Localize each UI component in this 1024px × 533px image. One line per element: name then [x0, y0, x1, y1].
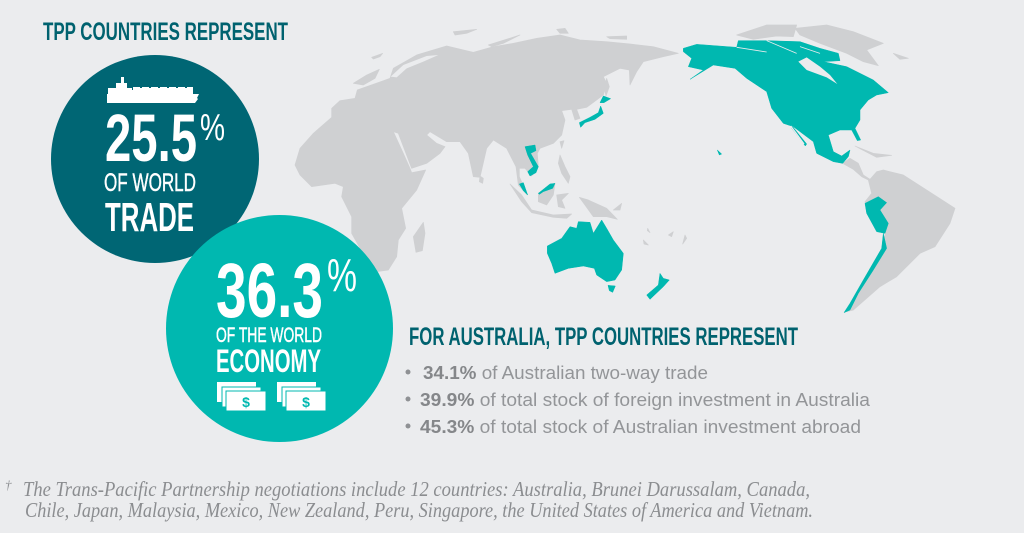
- map: Americas and Pacific: [643, 25, 955, 313]
- world map: [295, 25, 955, 313]
- map: grey Americas: [643, 25, 955, 312]
- map: Baja California gap: [791, 126, 804, 144]
- map: Sumatra and Java: [510, 184, 572, 218]
- map: Australia: [547, 220, 623, 282]
- circle: world trade: [51, 55, 259, 263]
- map: Vietnam: [525, 145, 538, 176]
- footnote: †: [5, 477, 12, 492]
- map: Madagascar: [413, 222, 425, 252]
- map: Afro-Eurasia in grey: [295, 28, 678, 272]
- map: Baltic and White Sea inlets: [391, 55, 438, 77]
- stat: 36.3 percent: 36.3: [216, 248, 323, 334]
- map: Borneo: [538, 183, 555, 205]
- map: Malaysia: [519, 183, 528, 195]
- icon: banknotes left: [217, 382, 266, 411]
- footnote: The Trans-Pacific Partnership negotiations include 12 countries: Australia, Brunei Darussalam, Canada,: [23, 477, 810, 501]
- map: Hudson Bay: [798, 57, 837, 84]
- map: Arctic channels: [737, 41, 820, 53]
- bullet list: Australian statistics: 34.1% of Australian two-way trade: [423, 363, 708, 383]
- map: New Guinea: [579, 197, 617, 219]
- map: Sulawesi and Moluccas: [557, 193, 568, 208]
- icon: banknotes left: $: [242, 394, 250, 410]
- circle: world economy: ECONOMY: [216, 343, 321, 379]
- circle: world economy: [166, 215, 393, 442]
- label: of world trade: OF WORLD: [104, 169, 196, 197]
- map: TPP members in Asia-Pacific: [519, 96, 623, 292]
- map: Tasmania: [608, 285, 615, 292]
- heading: for Australia: FOR AUSTRALIA, TPP COUNTRIES REPRESENT: [409, 323, 798, 351]
- circle: world trade: %: [200, 107, 225, 149]
- icon: banknotes right: $: [302, 394, 310, 410]
- stat: 25.5 percent: 25.5: [105, 101, 197, 176]
- circle: world economy: %: [327, 249, 357, 301]
- circle: world trade: TRADE: [105, 194, 194, 240]
- bullet list: Australian statistics: 39.9% of total stock of foreign investment in Australia: [420, 390, 871, 410]
- icon: banknotes right: [277, 382, 326, 411]
- map: Sri Lanka: [479, 176, 483, 183]
- icon: container ship: [107, 77, 199, 103]
- map: Sakhalin: [604, 78, 609, 96]
- footnote: [5, 477, 813, 522]
- map: teal Americas: [647, 41, 888, 313]
- footnote: Chile, Japan, Malaysia, Mexico, New Zealand, Peru, Singapore, the United States of America and Vietnam.: [25, 498, 813, 522]
- bullet list: Australian statistics: [406, 363, 871, 437]
- label: of the world economy: OF THE WORLD: [216, 324, 322, 347]
- heading: TPP countries represent: TPP COUNTRIES REPRESENT: [43, 18, 288, 46]
- bullet list: Australian statistics: 45.3% of total stock of Australian investment abroad: [420, 417, 861, 437]
- map: Japan: [600, 96, 611, 103]
- map: Philippines: [558, 155, 570, 183]
